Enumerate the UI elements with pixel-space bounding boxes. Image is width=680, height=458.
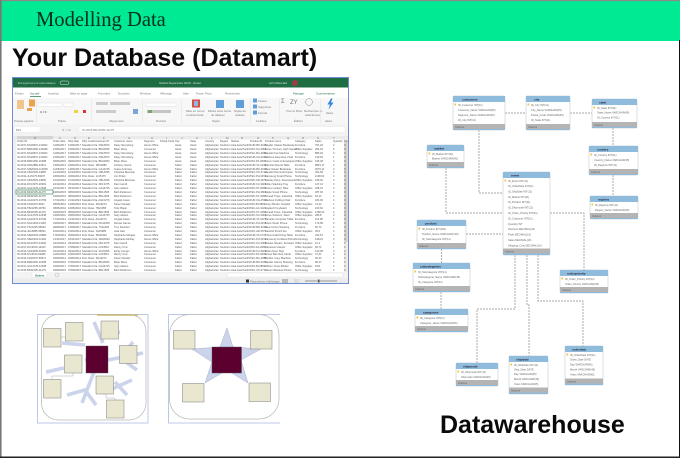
table: orderdate: Years VARCHAR(45): [570, 372, 594, 376]
table: orderquantity: [560, 270, 608, 293]
table: orderquantity: Indexes: [562, 288, 572, 292]
table: market: [427, 145, 464, 168]
table: shipmode: Shipmode VARCHAR(45): [461, 375, 491, 379]
table: shipdate: Month VARCHAR(45): [514, 377, 539, 381]
spreadsheet window chrome: Power Pivot: [196, 92, 212, 96]
table: event: ID_OrderDate INT(11): [508, 184, 534, 188]
spreadsheet window chrome: I: [166, 136, 167, 140]
spreadsheet window chrome: L: [211, 136, 213, 140]
table: city: Postal_Code VARCHAR(45): [531, 113, 564, 117]
spreadsheet window chrome: Insérer: [258, 99, 267, 103]
spreadsheet window chrome: Insertion: [48, 92, 59, 96]
spreadsheet window chrome: Q: [287, 136, 290, 140]
table: categories: Indexes: [417, 327, 427, 331]
spreadsheet window chrome: Global Superstore 2016 - Excel: [159, 81, 201, 85]
spreadsheet column: state: State Herat Herat Herat Herat Herat Kabul Kabul Kabul Kabul Kabul Kabul Kabul Kabul Kabul Kabul Kabul Kabul Kabul Kabul Kabul Kabul Kabul Kabul Kabul Kabul Kabul Kabul Kabul Kabul Kabul Kabul Kabul Kabul: [190, 140, 197, 272]
spreadsheet window chrome: de tableau: [211, 113, 225, 117]
table: shipdate: [509, 356, 548, 394]
table: country: [589, 146, 638, 175]
table: city: Indexes: [528, 125, 538, 129]
table: market: market: [434, 146, 444, 150]
table: categories: [415, 309, 468, 332]
spreadsheet window chrome: Supprimer: [258, 105, 271, 109]
chart: datawarehouse entity relationship diagram: [412, 96, 638, 394]
table: product: [417, 220, 466, 249]
spreadsheet window chrome: Partager: [293, 92, 304, 96]
table: event: Quantity INT: [508, 222, 523, 226]
spreadsheet window chrome: B24: [16, 128, 22, 132]
spreadsheet column: order id: Order ID IN-2017-DS16870-131844 IN-2017-BM11650-133289 IN-2017-DS16870-131844 IN-2017-DS16870-131844 IN-2015-BM11650-10288 IN-2014-DR12880-40511 IN-2017-SM20320-114848 IN-2016-CB12535-13865 IN-2014-JL15175-69007 IN-2017-CB12535-13865 IN-2014-DK13375-46393 IN-2017-GA14725-12338 IN-2015-BD11505-41275 IN-2015-BD11505-41275 ID-2014-AG10270-91769 IN-2016-KD16270-5837 IN-2016-TB21055-39766 IN-2015-BD11505-41275 IN-2016-GA14725-12338 ID-2014-AG10270-91769 IN-2017-DG13300-13097 IN-2017-TS21205-56002 IN-2014-JH15985-55833 IN-2014-SM20320-46882 IN-2017-SM20320-11484 IN-2014-DK13375-44393 IN-2017-DJ13510-12043 IN-2014-SC20095-46393 IN-2015-DJ13510-62086 IN-2014-KD16270-58371 IN-2016-BM11650-10288 IN-2017-GA14725-12338 IN-2015-BD11505-41275: [17, 140, 48, 272]
table: shipdate: Ship_Date DATE: [514, 368, 534, 372]
spreadsheet window chrome: Mettre sous forme: [208, 109, 232, 113]
spreadsheet window chrome: K: [196, 136, 198, 140]
table: state: Indexes: [594, 123, 604, 127]
spreadsheet column: country: Country Afghanistan Afghanistan Afghanistan Afghanistan Afghanistan Afghanistan Afghanistan Afghanistan Afghanistan Afghanistan Afghanistan Afghanistan Afghanistan Afghanistan Afghanistan Afghanistan Afghanistan Afghanistan Afghanistan Afghanistan Afghanistan Afghanistan Afghanistan Afghanistan Afghanistan Afghanistan Afghanistan Afghanistan Afghanistan Afghanistan Afghanistan Afghanistan Afghanistan: [205, 140, 219, 272]
table: regions: Indexes: [592, 214, 602, 218]
table: orderdate: [565, 346, 603, 385]
spreadsheet column: postal code: Postal Code: [160, 140, 174, 143]
spreadsheet window chrome: H: [151, 136, 153, 140]
table: shipmode: [456, 363, 498, 386]
table: market: ID_Market INT(11): [432, 152, 453, 156]
table: shipdate: Indexes: [511, 388, 521, 392]
table: regions: [590, 196, 638, 219]
table: regions: Region_Name VARCHAR(45): [595, 208, 630, 212]
table: event: ID_Shipmode INT(11): [508, 206, 533, 210]
spreadsheet window chrome: Mise en forme: [186, 109, 205, 113]
table: event: Indexes: [505, 249, 515, 253]
spreadsheet window chrome: Presse-papiers: [14, 119, 34, 123]
table: customers: customers: [462, 97, 478, 101]
spreadsheet column: segment: Segment Home Office Consumer Home Office Home Office Consumer Consumer Home Office Consumer Consumer Consumer Consumer Consumer Consumer Consumer Consumer Consumer Consumer Consumer Consumer Consumer Consumer Consumer Consumer Home Office Home Office Consumer Consumer Home Office Consumer Consumer Consumer Consumer Consumer: [144, 140, 158, 272]
spreadsheet window chrome: Police: [58, 119, 66, 123]
spreadsheet window chrome: Nombre: [156, 119, 167, 123]
table: shipdate: Years VARCHAR(45): [514, 382, 538, 386]
table: state: state: [599, 100, 607, 104]
spreadsheet window chrome: Rechercher: [225, 92, 240, 96]
diagram: snowflake schema: [37, 314, 148, 424]
table: regions: ID_Regions INT(11): [595, 203, 618, 207]
spreadsheet window chrome: P: [272, 136, 274, 140]
spreadsheet window chrome: D: [74, 136, 76, 140]
table: categories: categories: [423, 310, 439, 314]
spreadsheet window chrome: Styles de: [234, 109, 246, 113]
relationship lines: [441, 113, 613, 363]
table: subcategories: ID_Categorie INT(11): [418, 280, 443, 284]
spreadsheet column: region and market: Region Market Southern Asia Asia Pacific Southern Asia Asia Pacific Southern Asia Asia Pacific Southern Asia Asia Pacific Southern Asia Asia Pacific Southern Asia Asia Pacific Southern Asia Asia Pacific Southern Asia Asia Pacific Southern Asia Asia Pacific Southern Asia Asia Pacific Southern Asia Asia Pacific Southern Asia Asia Pacific Southern Asia Asia Pacific Southern Asia Asia Pacific Southern Asia Asia Pacific Southern Asia Asia Pacific Southern Asia Asia Pacific Southern Asia Asia Pacific Southern Asia Asia Pacific Southern Asia Asia Pacific Southern Asia Asia Pacific Southern Asia Asia Pacific Southern Asia Asia Pacific Southern Asia Asia Pacific Southern Asia Asia Pacific Southern Asia Asia Pacific Southern Asia Asia Pacific Southern Asia Asia Pacific Southern Asia Asia Pacific Southern Asia Asia Pacific Southern Asia Asia Pacific Southern Asia Asia Pacific Southern Asia Asia Pacific: [220, 140, 250, 272]
spreadsheet column: discount: Dis 0 0 0 0 0 0 0 0 0 0 0 0 0 0 0 0 0 0 0 0 0 0 0 0 0 0 0 0 0 0 0 0 0: [344, 140, 348, 272]
spreadsheet window chrome: [12, 77, 349, 284]
spreadsheet column: product id: Product ID FUR-BO-3645 OFF-SU-3066 TEC-MA-4881 FUR-CH-4030 OFF-PA-3609 FUR-TA-4146 FUR-BO-3623 TEC-CO-3710 TEC-PH-3154 OFF-AR-3571 FUR-FU-3927 OFF-ST-3099 TEC-PH-3800 OFF-ST-4268 FUR-CH-4530 OFF-BI-2889 TEC-AC-3420 OFF-ST-4268 OFF-SU-3066 FUR-TA-3427 TEC-PH-3158 FUR-BO-3623 OFF-AR-3571 FUR-TA-3747 TEC-PH-3154 OFF-SU-3066 OFF-FA-2990 FUR-FU-3927 OFF-PA-3609 TEC-MA-4881 FUR-BO-3645 OFF-BI-2889 TEC-CO-3710: [250, 140, 267, 272]
spreadsheet column: category: Category Furniture Office Supplies Technology Furniture Office Supplies Furniture Furniture Technology Technology Office Supplies Furniture Office Supplies Technology Office Supplies Furniture Office Supplies Technology Office Supplies Office Supplies Furniture Technology Furniture Office Supplies Furniture Technology Office Supplies Office Supplies Furniture Office Supplies Technology Furniture Office Supplies Technology: [295, 140, 312, 272]
star shape: [192, 328, 261, 383]
table: customers: Indexes: [455, 125, 465, 129]
spreadsheet window chrome: IN-2015-BD11505-41275: [82, 128, 114, 132]
spreadsheet window chrome: Accueil: [30, 92, 40, 96]
spreadsheet window chrome: ZY: [290, 100, 298, 106]
table: orderquantity: Order_Priority VARCHAR(45): [565, 282, 599, 286]
spreadsheet window chrome: Paramètres d'affichage: [250, 279, 280, 283]
spreadsheet window chrome: Orders: [35, 273, 45, 277]
table: event: ID_Market INT(11): [508, 195, 529, 199]
panel: spreadsheet screenshot: [12, 77, 349, 284]
spreadsheet window chrome: Commentaires: [316, 92, 335, 96]
spreadsheet window chrome: Trier et filtrer: [286, 109, 302, 113]
dimension tables: [44, 321, 137, 418]
table: event: ID_Customer INT(11): [508, 216, 533, 220]
table: city: [526, 96, 570, 130]
snowflake arms: [46, 322, 143, 405]
spreadsheet window chrome: Fichier: [15, 92, 24, 96]
diagram: star schema: [168, 314, 280, 424]
spreadsheet window chrome: Formules: [98, 92, 111, 96]
table: country: ID_Country INT(11): [594, 153, 617, 157]
table: city: ID_City INT(11): [531, 103, 549, 107]
spreadsheet window chrome: Format: [258, 111, 267, 115]
table: market: Indexes: [429, 163, 439, 167]
table: country: country: [597, 147, 609, 151]
table: shipdate: ID_ShipDate INT(11): [514, 363, 538, 367]
table: regions: regions: [598, 197, 609, 201]
table: product: Indexes: [419, 244, 429, 248]
table: shipmode: ID_Shipmode INT(11): [461, 370, 486, 374]
table: subcategories: Indexes: [415, 287, 425, 291]
spreadsheet window chrome: sélectionner: [305, 113, 321, 117]
spreadsheet column: customer name: Customer name Daisy Stromberg Brian Moss Daisy Stromberg Daisy Stromberg Brian Moss Anthony Garza Grace Ambrose Christina Bowman Jim Potter Christina Bowman Dan Carroll Gary Adams Beth Dickinson Beth Dickinson Angela Green Karen Daniels Toby Braun Beth Dickinson Gary Adams Angela Green Denise Garner Troy Sanchez Jack Hart Stephanie Morgan Stephanie McKay Dan Carroll Danny Cruz Emily Cooper Danny Cruz Karen Daniels Brian Moss Gary Adams Beth Dickinson: [114, 140, 135, 272]
rounded panel: [42, 314, 146, 420]
spreadsheet window chrome: Styles: [212, 119, 220, 123]
spreadsheet window chrome: Affichage: [160, 92, 172, 96]
table: state: [592, 99, 637, 128]
outer frame: [168, 314, 280, 423]
table: orderdate: Indexes: [567, 379, 577, 383]
table: city: city: [534, 97, 540, 101]
table: event: ID_Event INT(11): [508, 179, 528, 183]
header band: [0, 1, 680, 40]
table: city: City_Name VARCHAR(45): [531, 108, 562, 112]
table: product: product: [425, 221, 437, 225]
spreadsheet window chrome: Idées: [326, 111, 334, 115]
spreadsheet window chrome: F: [103, 136, 105, 140]
table: shipdate: Day VARCHAR(45): [514, 372, 537, 376]
table: subcategories: [413, 263, 470, 292]
top accent line: [97, 314, 138, 316]
table: country: ID_Regions INT(11): [594, 163, 617, 167]
table: shipdate: shipdate: [516, 357, 529, 361]
table: event: Discount DECIMAL(10): [508, 227, 535, 231]
fact table: [86, 346, 108, 373]
spreadsheet window chrome: T: [333, 136, 335, 140]
rounded panel: [170, 314, 279, 419]
table: orderdate: Month VARCHAR(45): [570, 368, 595, 372]
spreadsheet window chrome: conditionnelle: [186, 113, 204, 117]
connector lines: [52, 337, 115, 400]
spreadsheet window chrome: Cellules: [256, 119, 267, 123]
table: customers: ID_Customer INT(11): [458, 103, 483, 107]
table: orderquantity: orderpriority: [567, 271, 586, 275]
table: state: ID_Country INT(11): [597, 116, 620, 120]
dimension tables: [174, 330, 272, 402]
spreadsheet window chrome: Édition: [294, 118, 303, 123]
spreadsheet column: sales: Sales 751,26 254,22 886,02 130,02 165,48 8843,17 3076,11 262,68 1138,64 249,02 147,41 468,01 387,06 64,12 181,00 14,24 163,62 1298,14 286,8 113,08 179,58 56,74 36,6 222,54 1284,6 12,4 96,72 120,08 47,21 36,43 89,17 8,84 94,01: [315, 140, 324, 272]
spreadsheet window chrome: Idées: [325, 119, 333, 123]
table: product: Product_Name VARCHAR(100): [422, 232, 459, 236]
table: event: Shipping_Cost DECIMAL(10): [508, 243, 542, 247]
spreadsheet window chrome: Données: [118, 92, 130, 96]
spreadsheet window chrome: O: [257, 136, 260, 140]
spreadsheet window chrome: Σ: [281, 99, 285, 105]
spreadsheet window chrome: cellules: [235, 113, 245, 117]
table: orderdate: Order_Date DATE: [570, 358, 591, 362]
spreadsheet window chrome: C: [59, 136, 61, 140]
heading: your database: Your Database (Datamart): [12, 44, 317, 72]
table: market: Market VARCHAR(45): [432, 156, 458, 160]
table: customers: Customer_Name VARCHAR(45): [458, 108, 496, 112]
table: orderdate: orderdate: [572, 347, 587, 351]
table: customers: Segment_Name VARCHAR(45): [458, 113, 495, 117]
spreadsheet window chrome: J: [181, 136, 183, 140]
table: subcategories: subcategories: [420, 264, 441, 268]
table: state: ID_State INT(11): [597, 106, 617, 110]
table: event: ID_Product INT(11): [508, 200, 530, 204]
table: state: State_Name VARCHAR(45): [597, 110, 629, 114]
spreadsheet column: dates: Order date 12/06/2017 12/06/2017 12/06/2017 12/06/2017 06/06/2015 13/06/2014 11/06/2017 12/10/2016 18/09/2014 12/10/2016 24/10/2014 24/12/2017 04/09/2015 04/09/2015 17/11/2014 08/05/2016 08/05/2016 04/09/2015 24/05/2016 17/11/2014 04/09/2017 09/08/2017 10/03/2014 17/09/2014 14/11/2017 24/10/2014 03/08/2017 04/12/2014 12/02/2015 18/05/2014 03/09/2016 22/09/2017 03/08/2015: [53, 140, 66, 272]
spreadsheet window chrome: Alignement: [109, 119, 124, 123]
table: orderdate: ID_OrderDate INT(11): [570, 353, 596, 357]
table: customers: [453, 96, 505, 130]
table: event: ID_Order_Priority INT(11): [508, 211, 538, 215]
table: subcategories: SubCategorie_Name VARCHAR(45): [418, 275, 460, 279]
outer frame: [38, 314, 148, 423]
spreadsheet window chrome: R: [302, 136, 304, 140]
spreadsheet window chrome: Enregistrement automatique: [18, 81, 56, 85]
table: country: Indexes: [591, 170, 601, 174]
fact table: [212, 347, 242, 373]
table: categories: Categorie_Name VARCHAR(45): [420, 321, 458, 325]
spreadsheet column: city: City Herat Herat Herat Herat Herat Kabul Kabul Kabul Kabul Kabul Kabul Kabul Kabul Kabul Kabul Kabul Kabul Kabul Kabul Kabul Kabul Kabul Kabul Kabul Kabul Kabul Kabul Kabul Kabul Kabul Kabul Kabul Kabul: [175, 140, 182, 272]
table: city: ID_State INT(11): [531, 118, 551, 122]
table: event: ID_ShipDate INT(11): [508, 189, 532, 193]
table: shipmode: shipmode: [463, 364, 478, 368]
table: customers: ID_City INT(11): [458, 118, 476, 122]
spreadsheet column: ship date: Ship date 16/06/2017 16/06/2017 16/06/2017 16/06/2017 09/06/2015 15/06/2014 14/06/2017 16/10/2016 20/09/2014 16/10/2016 29/10/2014 28/12/2017 08/09/2015 08/09/2015 21/11/2014 12/05/2016 10/05/2016 08/09/2015 29/05/2016 21/11/2014 08/09/2017 14/08/2017 15/03/2014 20/09/2014 18/11/2017 29/10/2014 07/08/2017 09/12/2014 16/02/2015 20/05/2014 07/09/2016 27/09/2017 07/08/2015: [68, 140, 81, 272]
table: orderquantity: ID_Order_Priority INT(11): [565, 277, 595, 281]
table: event: Sales DECIMAL(10): [508, 238, 531, 242]
table: country: Country_Name VARCHAR(45): [594, 158, 629, 162]
spreadsheet window chrome: Azzi Mouctad: [269, 81, 287, 85]
spreadsheet window chrome: N: [241, 136, 243, 140]
table: product: ID_Product INT(100): [422, 227, 446, 231]
table: shipmode: Indexes: [458, 381, 468, 385]
heading: datawarehouse: Datawarehouse: [440, 411, 625, 439]
table: event: event: [511, 173, 519, 177]
table: subcategories: ID_Subcategorie INT(11): [418, 270, 447, 274]
spreadsheet window chrome: Aide: [183, 92, 189, 96]
spreadsheet window chrome: Rechercher et: [304, 109, 322, 113]
spreadsheet window chrome: B: [34, 136, 36, 140]
spreadsheet window chrome: G: [128, 136, 131, 140]
spreadsheet window chrome: M: [226, 136, 229, 140]
table: event: [503, 172, 550, 255]
spreadsheet window chrome: ✕ ✓ fx: [62, 128, 71, 132]
header title: Modelling Data: [36, 9, 166, 31]
table: product: ID_Subcategorie INT(11): [422, 237, 451, 241]
spreadsheet window chrome: G I S: [40, 110, 47, 114]
spreadsheet column: product name: Product name Sauder Classic Bookcase Acme Trimmer, High Speed Hewlett Fax Machine Harbour Executive Chair Xerox Cards & Envelopes Barricks Round Table Ikea Classic Bookcase Hewlett Personal Copier Samsung Smart Phone Stanley Pens, Fluorescent Eldon Stacking Tray Tenex Lockers, Blue Apple Smart Phone Smead Trays, Industrial Harbour Folding Chair Avery Binder, Durable Logitech Keyboard Smead Trays, Industrial Acme Scissors, Steel Barricks Computer Table Cisco Smart Phone Ikea Corner Shelving Sanford Pencil Set Chromcraft Dining Table Samsung Cordless Phone Fiskars Shears, Serrated Advantus Clamps Eldon Door Stop Green Bar Note Cards Brother Copy Machine Sauder Library Shelving Wilson Jones Binder Canon Wireless Printer: [265, 140, 297, 272]
spreadsheet column: ship mode: Ship mode/customer ID Standard Cla. DS16870 Standard Cla. BM11650 Standard Cla. DS16870 Standard Cla. DS16870 Standard Cla. BM11650 First Class DR12880 Standard Cla. GA14725 Standard Cla. CB12535 First Class JL15175 Standard Cla. CB12535 Standard Cla. DK13375 Standard Cla. GA14725 Standard Cla. BD11505 Standard Cla. BD11505 Standard Cla. AG10270 First Class KD16270 First Class TB21055 Standard Cla. BD11505 Standard Cla. GA14725 First Class AG10270 Standard Cla. DG13300 Standard Cla. TS21205 First Class JH15985 First Class SM20320 Standard Cla. SM20320 Standard Cla. DK13375 Standard Cla. DJ13510 Standard Cla. SC20095 Standard Cla. DJ13510 First Class KD16270 Standard Cla. BM11650 Standard Cla. GA14725 Standard Cla. BD11505: [82, 140, 110, 272]
spreadsheet column: quantity: Quantity 2 6 3 1 4 3 3 2 4 2 3 4 3 2 4 1 3 4 2 1 3 2 4 2 3 4 1 3 2 4 2 3 2: [333, 140, 343, 272]
spreadsheet window chrome: S: [317, 136, 319, 140]
spreadsheet window chrome: Révision: [140, 92, 151, 96]
table: categories: ID_Categorie INT(11): [420, 316, 445, 320]
table: event: Profit DECIMAL(10): [508, 233, 531, 237]
spreadsheet window chrome: Mise en page: [70, 92, 88, 96]
table: orderdate: Day VARCHAR(45): [570, 362, 593, 366]
spreadsheet window chrome: E: [88, 136, 90, 140]
